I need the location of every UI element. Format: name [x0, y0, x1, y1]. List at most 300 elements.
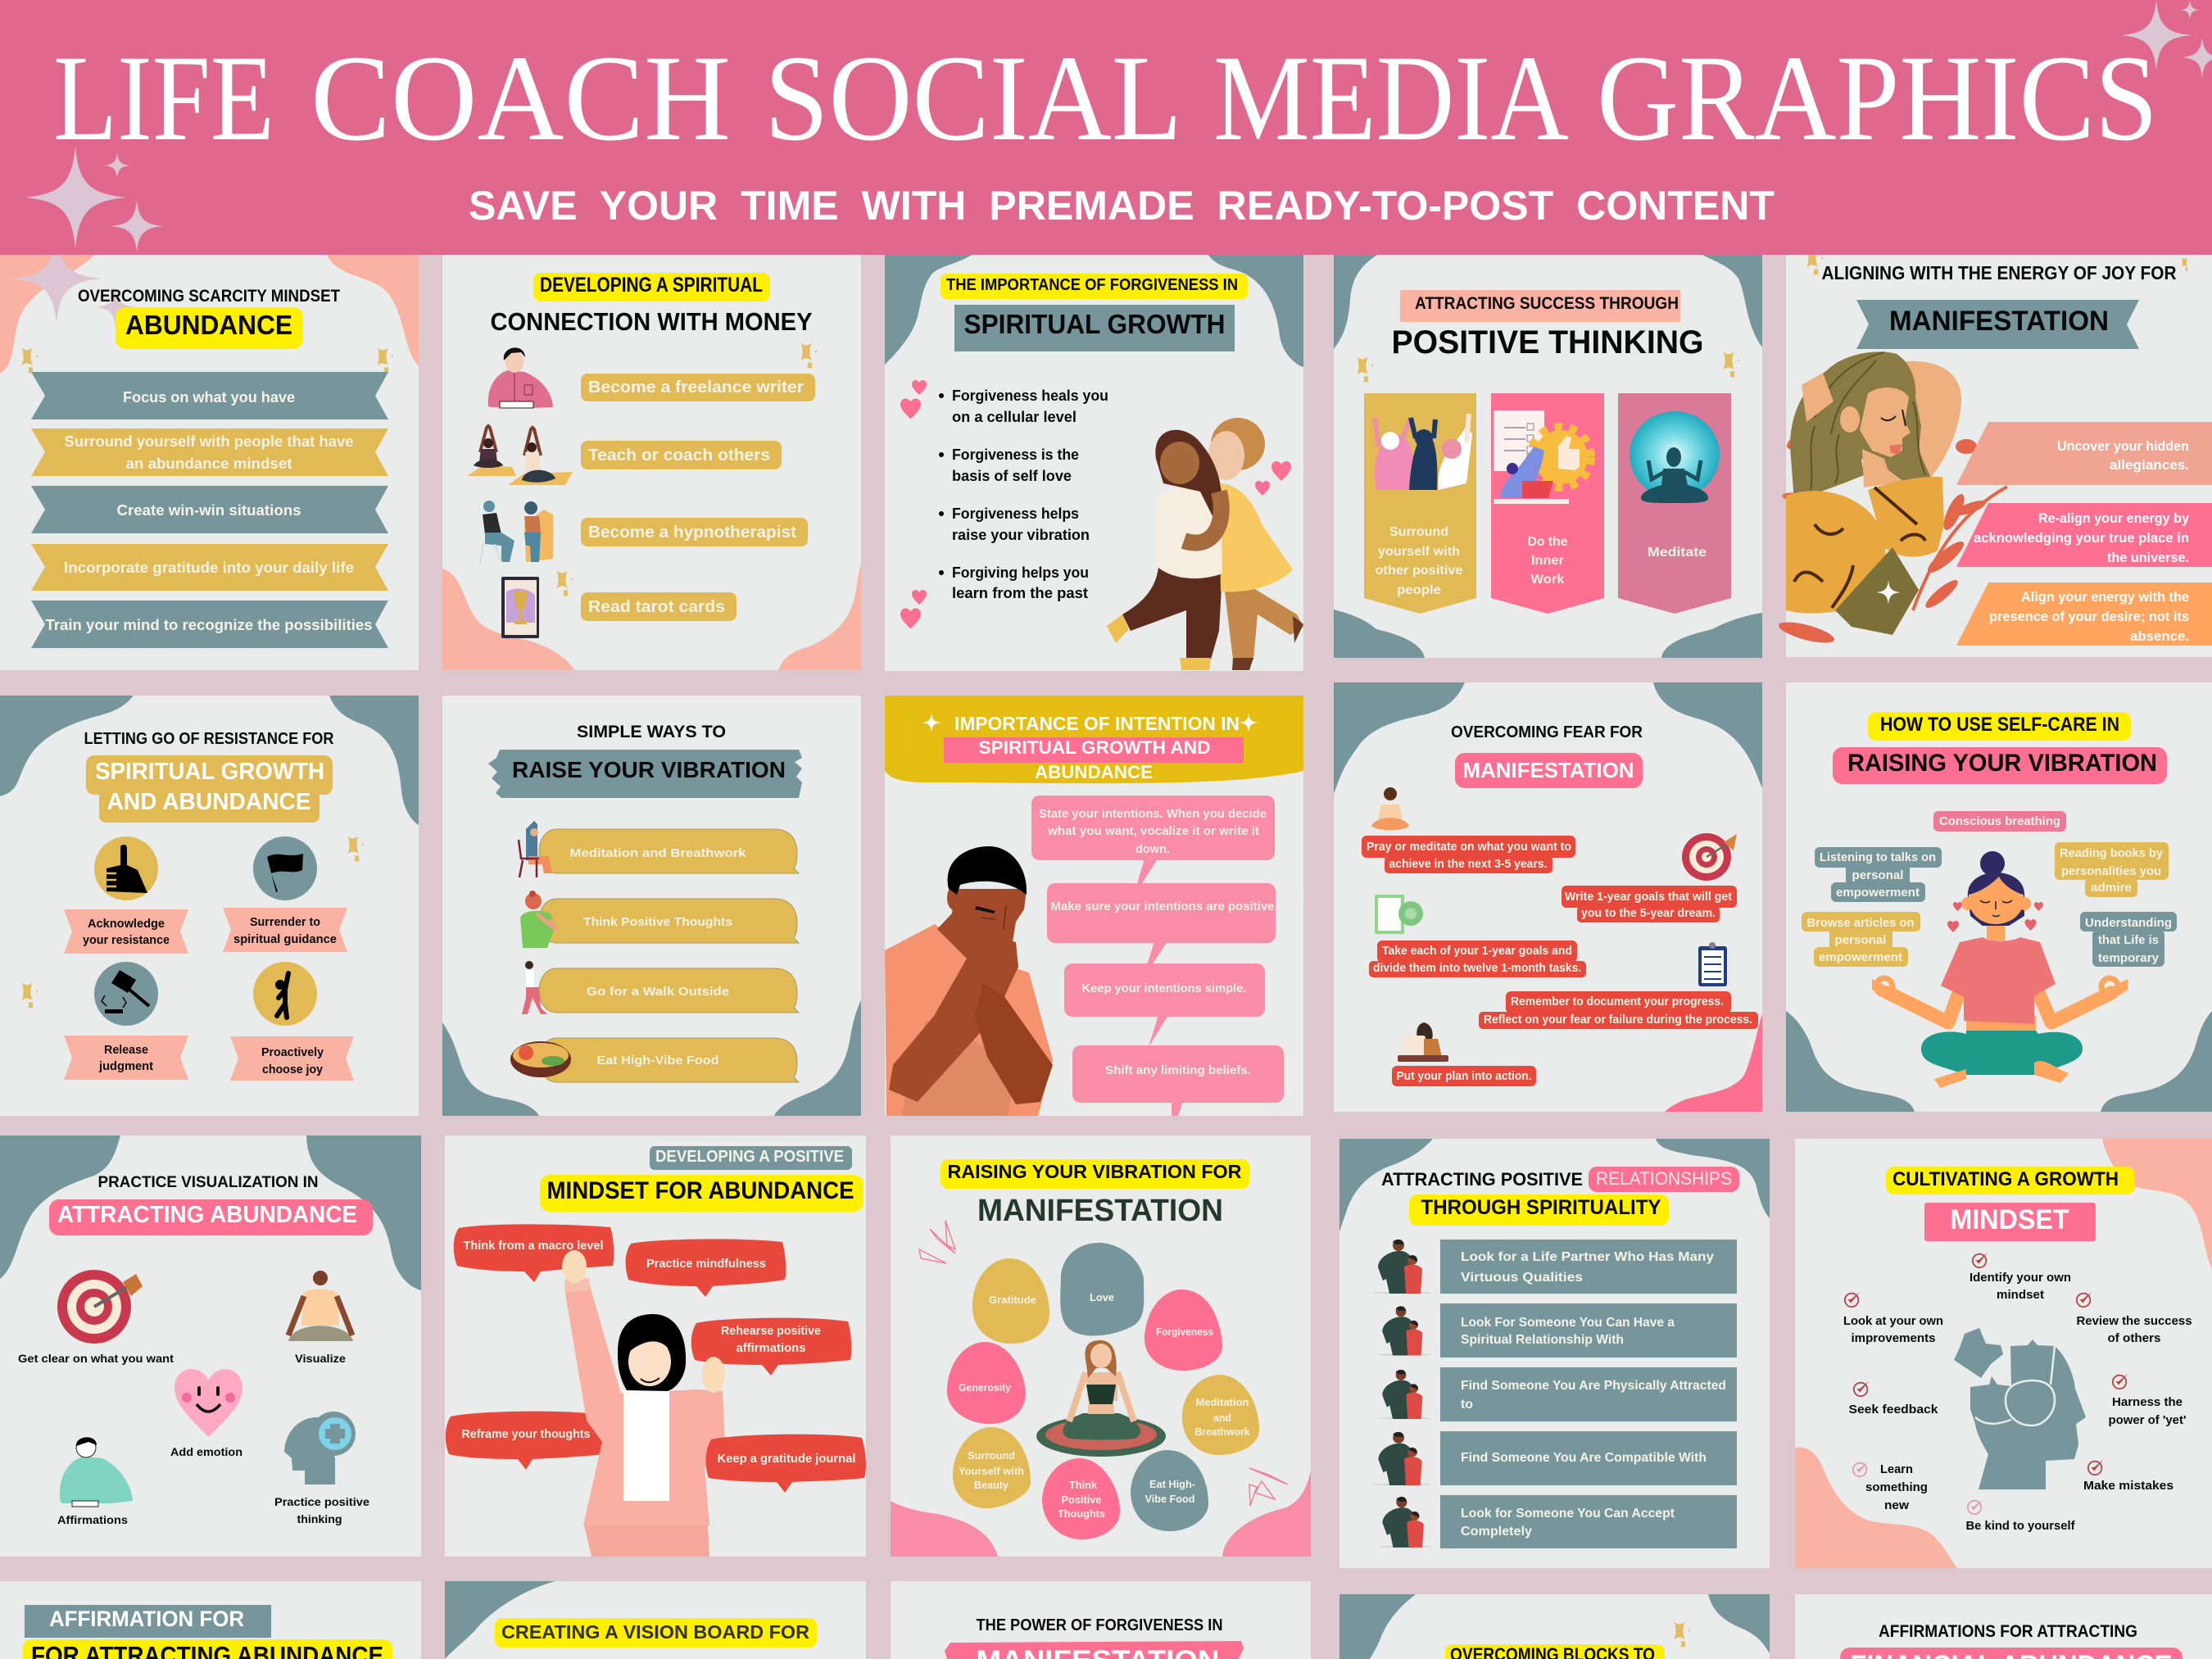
- band: re-align energy: Re-align your energy by: [2038, 510, 2190, 526]
- banner: surround yourself: [1364, 393, 1476, 614]
- heading: overcoming fear for: OVERCOMING FEAR FOR: [1451, 723, 1643, 741]
- bubble: practice mindfulness: Practice mindfulness: [646, 1257, 766, 1271]
- blob: love: [1060, 1243, 1144, 1335]
- heading: mindset for abundance: [540, 1175, 863, 1212]
- bubble: think from a macro level: Think from a macro level: [464, 1239, 603, 1253]
- blob: surround yourself with beauty: [953, 1427, 1031, 1508]
- bubble: high-vibe food: [539, 1038, 799, 1082]
- bullet list: forgiveness: basis of self love: [952, 468, 1072, 484]
- checklist: look at your own improvements: Look at your own: [1843, 1314, 1943, 1328]
- icon: thinking woman: [520, 891, 555, 948]
- panel: affirmation for attracting abundance: [0, 1581, 421, 1659]
- checklist: make mistakes: [2083, 1460, 2173, 1493]
- bubble: walk outside: [539, 968, 799, 1013]
- panel: overcoming fear: [1334, 682, 1762, 1112]
- blob: gratitude: Gratitude: [989, 1294, 1036, 1306]
- ribbon: proactively choose joy: Proactively: [261, 1046, 324, 1059]
- blob: think positive thoughts: Positive: [1062, 1494, 1102, 1506]
- blob: meditation and breathwork: Breathwork: [1194, 1426, 1250, 1438]
- heading: practice visualization: PRACTICE VISUALIZATION IN: [98, 1174, 318, 1191]
- heading: spiritual growth and abundance: ABUNDANCE: [1035, 762, 1153, 782]
- title: MEDIA: [1213, 30, 1569, 166]
- label: browse articles: personal: [1835, 933, 1886, 947]
- label: browse articles: Browse articles on: [1807, 916, 1914, 930]
- heading: raising your vibration for: [941, 1159, 1249, 1189]
- label: pray or meditate: Pray or meditate on what you want to: [1367, 840, 1571, 854]
- heading: manifestation ribbon: [1856, 300, 2139, 349]
- subtitle: SAVE YOUR TIME WITH PREMADE READY-TO-POST CONTENT: [469, 183, 1775, 229]
- bubble: reframe your thoughts: [446, 1412, 605, 1470]
- blob: surround yourself with beauty: Surround: [968, 1450, 1015, 1462]
- ribbon: proactively choose joy: [230, 1036, 354, 1081]
- heading: how to use self-care: [1868, 712, 2131, 741]
- checklist: review success of others: Review the success: [2076, 1314, 2192, 1328]
- blob: eat high-vibe food: Vibe Food: [1145, 1494, 1194, 1505]
- blob: forgiveness: [1145, 1290, 1222, 1371]
- checklist: learn something new: [1853, 1462, 1928, 1512]
- blob: generosity: [947, 1342, 1026, 1424]
- ribbon: acknowledge your resistance: your resistance: [83, 934, 170, 947]
- row: accept completely: [1440, 1495, 1737, 1548]
- blob: gratitude: [972, 1258, 1049, 1344]
- label: put plan into action: [1392, 1066, 1536, 1086]
- label: listening to talks: personal: [1852, 868, 1904, 882]
- label: understanding: Understanding: [2085, 916, 2172, 930]
- row: life partner: [1440, 1240, 1737, 1294]
- row: compatible: [1440, 1431, 1737, 1485]
- bullet list: forgiveness: Forgiveness helps: [952, 505, 1079, 522]
- label: practice positive thinking: Practice positive: [274, 1495, 369, 1508]
- illustration: woman meditating on mat: [1036, 1340, 1166, 1457]
- checklist: harness the power of yet: power of 'yet': [2109, 1413, 2186, 1427]
- title: COACH: [310, 30, 731, 166]
- illustration: woman with wavy hair: [1777, 351, 2007, 647]
- band: uncover hidden allegiances: [1956, 422, 2212, 485]
- heading: cultivating a growth: CULTIVATING A GROWTH: [1892, 1168, 2119, 1190]
- checklist: make mistakes: Make mistakes: [2083, 1479, 2173, 1493]
- band: align with presence: presence of your desire; not its: [1989, 609, 2189, 624]
- blob: eat high-vibe food: [1131, 1450, 1208, 1531]
- title: LIFE: [53, 30, 274, 166]
- banner: surround yourself: yourself with: [1378, 545, 1460, 559]
- heading: manifestation: MANIFESTATION: [977, 1194, 1223, 1228]
- icon: food bowl: [510, 1041, 571, 1077]
- panel: power of forgiveness: [891, 1581, 1311, 1659]
- icon: meditating man: [288, 1271, 353, 1341]
- bullet list: forgiveness: [939, 388, 1108, 601]
- icon: thumbs up: [94, 836, 158, 900]
- panel: cultivating a growth mindset: [1795, 1139, 2212, 1568]
- label: write 1-year goals: [1562, 886, 1737, 922]
- label: reading books: [2055, 842, 2169, 897]
- heading: creating a vision board: CREATING A VISION BOARD FOR: [501, 1621, 809, 1643]
- row: physically attracted: Find Someone You Are Physically Attracted: [1461, 1379, 1726, 1393]
- label: browse articles: empowerment: [1819, 950, 1902, 964]
- checklist: learn something new: Learn: [1880, 1462, 1913, 1476]
- checklist: learn something new: something: [1865, 1480, 1928, 1494]
- panel: attracting positive relationships: [1339, 1139, 1770, 1568]
- label: write 1-year goals: you to the 5-year dream.: [1581, 906, 1716, 920]
- checklist: harness the power of yet: [2109, 1374, 2186, 1427]
- label: write 1-year goals: Write 1-year goals that will get: [1565, 890, 1732, 904]
- panel: raising your vibration for manifestation: [891, 1135, 1311, 1557]
- icon: man writing: [488, 347, 553, 408]
- pill: freelance writer: Become a freelance writer: [588, 378, 804, 397]
- band: re-align energy: acknowledging your true place in: [1974, 530, 2189, 546]
- heading: importance of forgiveness: [941, 274, 1248, 299]
- icon: target: [1682, 833, 1737, 881]
- panel: importance of forgiveness: [885, 254, 1303, 671]
- label: visualize: Visualize: [295, 1352, 346, 1365]
- panel: raise your vibration: [442, 696, 861, 1116]
- panel: aligning with joy: [1777, 249, 2212, 657]
- blob: love: Love: [1090, 1292, 1114, 1303]
- row: accept completely: Completely: [1461, 1525, 1532, 1539]
- banner: do the inner work: Inner: [1531, 554, 1564, 568]
- checklist: look at your own improvements: improvements: [1852, 1331, 1935, 1345]
- illustration: meditating woman: [1872, 851, 2128, 1088]
- checklist: review success of others: of others: [2107, 1331, 2161, 1345]
- icon: therapy session: [480, 501, 553, 564]
- label: listening to talks: Listening to talks on: [1820, 850, 1936, 864]
- bubble: practice mindfulness: [626, 1239, 786, 1297]
- row: life partner: Look for a Life Partner Who Has Many: [1461, 1250, 1714, 1264]
- panel: mindset for abundance: [445, 1135, 866, 1557]
- ribbon: acknowledge your resistance: [64, 909, 188, 954]
- pill: hypnotherapist: Become a hypnotherapist: [588, 524, 796, 542]
- heading: manifestation: [1455, 753, 1643, 788]
- illustration: woman with raised fist: [562, 1250, 726, 1557]
- banner: do the inner work: Do the: [1527, 535, 1568, 549]
- icon: goals checklist: [1375, 895, 1423, 934]
- heading: attracting abundance: ATTRACTING ABUNDANCE: [57, 1202, 357, 1228]
- speech bubble: simple: Keep your intentions simple.: [1081, 981, 1247, 995]
- panel: spiritual connection with money: [442, 255, 861, 670]
- banner: surround yourself: Surround: [1389, 525, 1448, 539]
- checklist: seek feedback: [1848, 1381, 1938, 1416]
- sparkles: left: [25, 147, 163, 252]
- speech bubble: simple: [1064, 963, 1265, 1047]
- heading: spiritual growth and abundance: SPIRITUAL GROWTH: [95, 759, 324, 785]
- band: align with presence: Align your energy with the: [2021, 589, 2189, 605]
- heading: manifestation ribbon: MANIFESTATION: [1889, 306, 2109, 337]
- label: reading books: admire: [2091, 881, 2132, 895]
- speech bubble: limiting beliefs: Shift any limiting beliefs.: [1105, 1063, 1251, 1077]
- bubble: rehearse positive affirmations: affirmations: [736, 1341, 806, 1355]
- row: physically attracted: [1440, 1367, 1737, 1421]
- checklist: review success of others: [2076, 1292, 2192, 1345]
- blob: eat high-vibe food: Eat High-: [1149, 1479, 1195, 1490]
- panel: affirmations financial abundance: [1795, 1594, 2212, 1659]
- label: take each goal: divide them into twelve 1-month tasks.: [1373, 961, 1581, 975]
- row: spiritual relationship: Look For Someone You Can Have a: [1461, 1316, 1675, 1330]
- heading: spiritual growth and abundance: [86, 755, 333, 823]
- ribbon: train your mind: Train your mind to recognize the possibilities: [46, 617, 372, 633]
- bubble: meditation and breathwork: [539, 829, 799, 873]
- icon: person on chair: [519, 821, 552, 877]
- speech bubble: limiting beliefs: [1072, 1045, 1284, 1116]
- bubble: rehearse positive affirmations: Rehearse positive: [721, 1324, 821, 1338]
- label: practice positive thinking: thinking: [297, 1512, 342, 1525]
- heading: spiritual growth: [954, 305, 1235, 351]
- banner: do the inner work: [1491, 393, 1604, 614]
- checklist: identify your own mindset: Identify your own: [1969, 1271, 2071, 1285]
- heading: letting go of resistance: LETTING GO OF RESISTANCE FOR: [84, 730, 334, 748]
- speech bubble: intentions positive: Make sure your intentions are positive: [1050, 900, 1275, 913]
- icon: man writing affirmations: [60, 1437, 133, 1507]
- heading: importance of intention: IMPORTANCE OF INTENTION IN: [954, 713, 1240, 734]
- ribbon: surround yourself: Surround yourself with people that have: [64, 433, 354, 450]
- checklist: harness the power of yet: Harness the: [2112, 1395, 2183, 1409]
- label: take each goal: Take each of your 1-year goals and: [1382, 944, 1572, 958]
- heading: aligning with the energy of joy: ALIGNING WITH THE ENERGY OF JOY FOR: [1822, 262, 2177, 283]
- heading: attracting positive: ATTRACTING POSITIVE: [1381, 1169, 1583, 1190]
- icon: gavel: [94, 962, 158, 1026]
- pill: read tarot: Read tarot cards: [588, 598, 725, 616]
- heading: abundance: [116, 307, 303, 349]
- ribbon: surround yourself: [31, 428, 388, 476]
- blob: meditation and breathwork: and: [1213, 1412, 1231, 1424]
- panel: creating a vision board: [445, 1581, 866, 1659]
- label: conscious breathing: [1933, 811, 2066, 832]
- title: SOCIAL: [764, 30, 1182, 166]
- bubble: think positive thoughts: [539, 899, 799, 943]
- icon: target with arrow: [57, 1270, 143, 1344]
- panel: letting go of resistance: [0, 696, 419, 1116]
- icon: smiling heart: [175, 1369, 243, 1437]
- icon: dancing figure: [253, 962, 317, 1026]
- ribbon: release judgment: [64, 1036, 188, 1080]
- label: pray or meditate: achieve in the next 3-5 years.: [1389, 857, 1547, 871]
- heading: raise your vibration brush stroke: [488, 750, 802, 798]
- heading: relationships: RELATIONSHIPS: [1596, 1168, 1732, 1189]
- row: compatible: Find Someone You Are Compatible With: [1461, 1451, 1707, 1465]
- bubble: high-vibe food: Eat High-Vibe Food: [596, 1054, 719, 1067]
- bullet list: forgiveness: raise your vibration: [952, 527, 1090, 543]
- ribbon: gratitude: Incorporate gratitude into your daily life: [64, 560, 354, 576]
- pill: teach or coach: Teach or coach others: [588, 446, 770, 465]
- bubble: keep a gratitude journal: Keep a gratitude journal: [718, 1452, 855, 1466]
- blob: think positive thoughts: [1042, 1458, 1120, 1539]
- heading: affirmation for: [25, 1605, 271, 1638]
- icon: head with plus: [284, 1412, 356, 1484]
- heading: spiritual growth and abundance: SPIRITUAL GROWTH AND: [978, 737, 1211, 758]
- label: listening to talks: empowerment: [1836, 886, 1920, 900]
- icon: two people doing yoga: [467, 426, 573, 485]
- banner: surround yourself: other positive: [1375, 564, 1463, 578]
- panel: positive thinking: [1334, 255, 1762, 658]
- label: practice positive thinking: [274, 1495, 369, 1525]
- pill: freelance writer: [581, 374, 815, 401]
- icon: meditating person: [1371, 787, 1409, 830]
- bubble: rehearse positive affirmations: [691, 1318, 851, 1376]
- icon: flag: [253, 836, 317, 900]
- label: add emotion: Add emotion: [170, 1445, 243, 1458]
- label: document progress: [1479, 991, 1758, 1029]
- speech bubble: state your intentions: State your intentions. When you decide: [1039, 807, 1267, 821]
- heading: abundance: ABUNDANCE: [125, 310, 292, 340]
- sparkles: white: [922, 713, 1258, 732]
- heading: spiritual growth and abundance: [944, 737, 1244, 782]
- decorative sparkle: [11, 233, 102, 324]
- pill: teach or coach: [581, 441, 782, 469]
- speech bubble: state your intentions: down.: [1135, 842, 1170, 856]
- bullet list: forgiveness: Forgiveness heals you: [952, 388, 1108, 404]
- heading: developing a spiritual: [533, 273, 770, 301]
- band: uncover hidden allegiances: allegiances.: [2110, 457, 2189, 473]
- checklist: identify your own mindset: mindset: [1997, 1288, 2044, 1302]
- heading: importance of forgiveness: THE IMPORTANCE OF FORGIVENESS IN: [946, 276, 1238, 294]
- heading: mindset: [1924, 1203, 2096, 1241]
- heading: positive thinking: POSITIVE THINKING: [1391, 324, 1704, 360]
- ribbon: release judgment: Release: [104, 1044, 148, 1057]
- speech bubble: intentions positive: [1047, 883, 1276, 978]
- ribbon: proactively choose joy: choose joy: [262, 1063, 323, 1077]
- bubble: keep a gratitude journal: [706, 1435, 866, 1493]
- blob: forgiveness: Forgiveness: [1156, 1326, 1213, 1338]
- icons: couples: [1373, 1240, 1433, 1548]
- icon: walking woman: [522, 961, 547, 1014]
- pill: hypnotherapist: [581, 518, 808, 546]
- heading: affirmations for attracting: AFFIRMATIONS FOR ATTRACTING: [1879, 1622, 2137, 1641]
- band: re-align energy: [1956, 503, 2212, 567]
- label: listening to talks: [1815, 847, 1942, 902]
- pill: read tarot: [581, 592, 737, 621]
- icon: meditating silhouette on glowing circle: [1630, 411, 1720, 503]
- heading: power of forgiveness: THE POWER OF FORGIVENESS IN: [977, 1616, 1222, 1634]
- label: reading books: personalities you: [2061, 864, 2161, 878]
- speech bubble: state your intentions: [1031, 796, 1275, 898]
- illustration: praying man: [885, 846, 1053, 1116]
- bubble: meditation and breathwork: Meditation and Breathwork: [570, 846, 746, 860]
- bubble: think from a macro level: [454, 1224, 614, 1282]
- ribbon: acknowledge your resistance: Acknowledge: [88, 918, 165, 931]
- bullet list: forgiveness: Forgiving helps you: [952, 564, 1089, 581]
- decorative burst marks: [919, 1221, 1288, 1506]
- header band: gold: [885, 696, 1303, 783]
- heading: raise your vibration brush stroke: RAISE YOUR VIBRATION: [512, 757, 786, 782]
- bullet list: forgiveness: Forgiveness is the: [952, 446, 1079, 463]
- heading: mindset: MINDSET: [1950, 1204, 2069, 1235]
- checklist: be kind to yourself: [1966, 1499, 2075, 1533]
- panel: overcoming blocks: [1339, 1594, 1770, 1659]
- heading: raising your vibration for: RAISING YOUR VIBRATION FOR: [947, 1161, 1242, 1182]
- band: uncover hidden allegiances: Uncover your hidden: [2057, 438, 2189, 454]
- ribbon: gratitude: [31, 544, 388, 591]
- label: understanding: [2080, 912, 2177, 967]
- icon: clipboard: [1698, 942, 1727, 986]
- ribbon: surround yourself: an abundance mindset: [126, 456, 292, 472]
- heading: manifestation: MANIFESTATION: [1463, 758, 1634, 782]
- heading: developing a positive: DEVELOPING A POSITIVE: [655, 1148, 844, 1166]
- band: align with presence: [1956, 582, 2212, 646]
- bubble: think positive thoughts: Think Positive Thoughts: [583, 915, 732, 929]
- heading: raising your vibration: RAISING YOUR VIBRATION: [1847, 750, 2157, 777]
- checklist: look at your own improvements: [1843, 1292, 1943, 1345]
- heading: overcoming scarcity mindset: OVERCOMING SCARCITY MINDSET: [78, 287, 340, 306]
- banner: surround yourself: people: [1397, 583, 1441, 597]
- checklist: learn something new: new: [1884, 1498, 1909, 1512]
- icon: tarot cards: [501, 577, 539, 638]
- blob: surround yourself with beauty: Beauty: [974, 1480, 1009, 1491]
- label: understanding: that Life is: [2098, 933, 2159, 947]
- label: put plan into action: Put your plan into action.: [1396, 1069, 1532, 1083]
- banner: meditate: Meditate: [1648, 546, 1707, 560]
- label: browse articles: [1802, 912, 1920, 967]
- speech bubble: state your intentions: what you want, vocalize it or write it: [1047, 824, 1259, 838]
- title: [53, 30, 2158, 166]
- heading: spiritual growth and abundance: AND ABUNDANCE: [107, 789, 311, 815]
- blob: think positive thoughts: Think: [1069, 1480, 1097, 1491]
- row: spiritual relationship: [1440, 1303, 1737, 1358]
- title: GRAPHICS: [1597, 30, 2158, 166]
- band: re-align energy: the universe.: [2107, 550, 2189, 565]
- heading: simple ways to: SIMPLE WAYS TO: [577, 723, 726, 741]
- icon: checklist with thumbs up: [1494, 410, 1590, 504]
- checklist: seek feedback: Seek feedback: [1848, 1403, 1938, 1416]
- blob: meditation and breathwork: [1182, 1375, 1259, 1455]
- ribbon: focus on what you have: [31, 372, 388, 419]
- bullet list: forgiveness: on a cellular level: [952, 409, 1077, 425]
- heading: developing a spiritual: DEVELOPING A SPIRITUAL: [540, 274, 763, 297]
- panel: self-care: [1786, 682, 2212, 1112]
- label: affirmations: Affirmations: [57, 1513, 128, 1526]
- heading: connection with money: CONNECTION WITH MONEY: [490, 307, 813, 336]
- heading: attracting success through: ATTRACTING SUCCESS THROUGH: [1415, 294, 1679, 313]
- heading: manifestation brush: [945, 1641, 1244, 1659]
- panel: overcoming scarcity mindset: [0, 233, 419, 670]
- icon: person at laptop: [1398, 1022, 1448, 1062]
- icons: hearts: [900, 380, 1291, 629]
- ribbon: surrender: [223, 908, 347, 952]
- banner: meditate: [1618, 393, 1731, 614]
- label: document progress: Remember to document your progress.: [1511, 995, 1724, 1009]
- ribbon: train your mind: [31, 601, 388, 648]
- icon: group of people cheering: [1375, 414, 1472, 490]
- heading: affirmation for: AFFIRMATION FOR: [49, 1607, 244, 1631]
- label: reading books: Reading books by: [2060, 846, 2164, 860]
- heading: attracting success through: [1400, 290, 1680, 322]
- blob: think positive thoughts: Thoughts: [1058, 1508, 1105, 1520]
- bullet list: forgiveness: learn from the past: [952, 585, 1088, 601]
- checklist: identify your own mindset: [1969, 1253, 2071, 1302]
- row: spiritual relationship: Spiritual Relationship With: [1461, 1333, 1624, 1347]
- heading: creating a vision board: [495, 1618, 817, 1648]
- heading: how to use self-care: HOW TO USE SELF-CARE IN: [1880, 714, 2119, 736]
- blob: generosity: Generosity: [959, 1382, 1011, 1394]
- bubble: reframe your thoughts: Reframe your thoughts: [462, 1427, 590, 1441]
- ribbon: focus on what you have: Focus on what you have: [123, 389, 295, 406]
- label: understanding: temporary: [2098, 951, 2160, 965]
- banner: do the inner work: Work: [1530, 573, 1565, 587]
- heading: mindset for abundance: MINDSET FOR ABUNDANCE: [547, 1177, 854, 1204]
- row: life partner: Virtuous Qualities: [1461, 1271, 1583, 1285]
- ribbon: win-win: [31, 486, 388, 533]
- ribbon: win-win: Create win-win situations: [116, 502, 301, 519]
- row: accept completely: Look for Someone You Can Accept: [1461, 1507, 1675, 1521]
- band: align with presence: absence.: [2130, 628, 2189, 644]
- panel: practice visualization: [0, 1135, 421, 1557]
- checklist: be kind to yourself: Be kind to yourself: [1966, 1519, 2075, 1533]
- ribbon: surrender: spiritual guidance: [233, 933, 337, 946]
- label: pray or meditate: [1362, 836, 1575, 873]
- panel: importance of intention: [885, 696, 1303, 1116]
- illustration: couple hugging: [1107, 418, 1303, 670]
- blob: meditation and breathwork: Meditation: [1196, 1397, 1249, 1408]
- heading: through spirituality: THROUGH SPIRITUALITY: [1421, 1196, 1661, 1219]
- icon: puzzle head: [1954, 1328, 2086, 1489]
- header banner: [0, 0, 2212, 255]
